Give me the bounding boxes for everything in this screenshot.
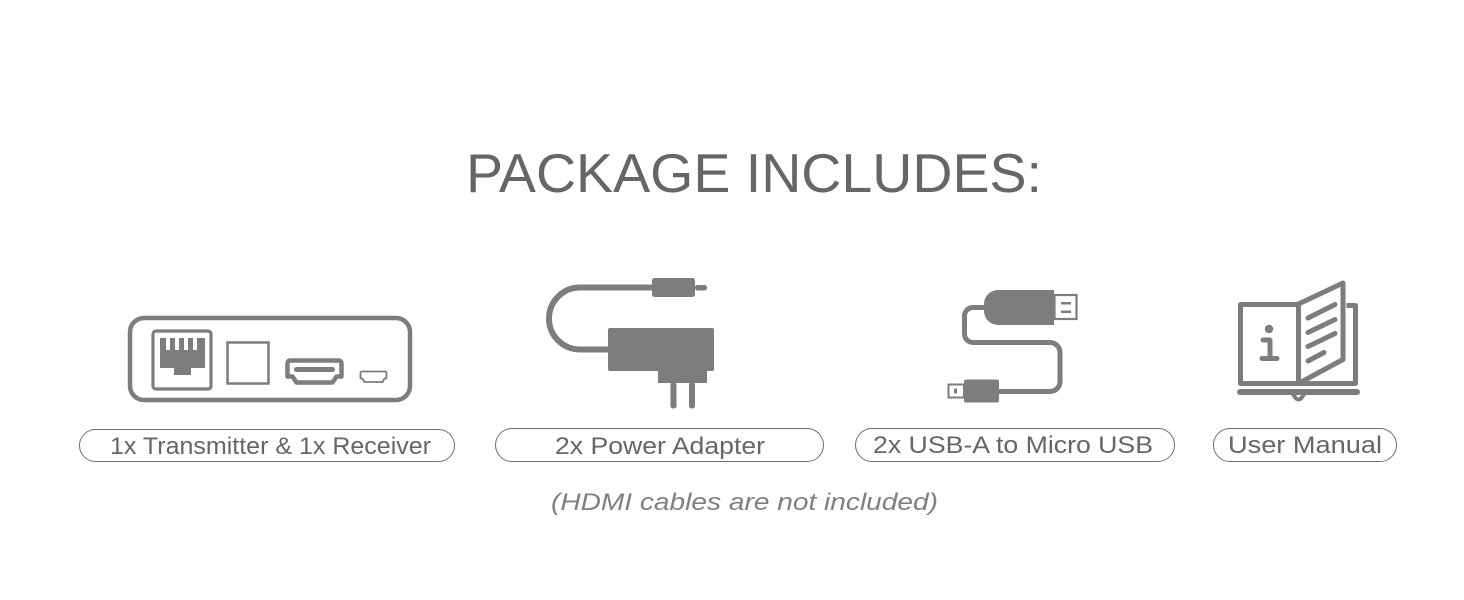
- note: HDMI cables not included: (HDMI cables are not included): [551, 489, 938, 516]
- icon: power adapter: [549, 278, 714, 408]
- icon: transmitter and receiver ports: [130, 318, 410, 400]
- title: PACKAGE INCLUDES:: [466, 142, 1042, 204]
- label: USB cable: 2x USB-A to Micro USB: [873, 432, 1153, 459]
- label: power adapter: [496, 428, 824, 462]
- icon: user manual book: [1240, 283, 1357, 400]
- label: user manual: [1214, 428, 1396, 462]
- icon: USB-A to Micro USB cable: [948, 290, 1076, 402]
- label: transmitter and receiver: [80, 430, 454, 462]
- label: USB cable: [856, 428, 1174, 462]
- label: transmitter and receiver: 1x Transmitter & 1x Receiver: [110, 433, 431, 460]
- label: user manual: User Manual: [1228, 432, 1382, 459]
- label: power adapter: 2x Power Adapter: [555, 433, 765, 460]
